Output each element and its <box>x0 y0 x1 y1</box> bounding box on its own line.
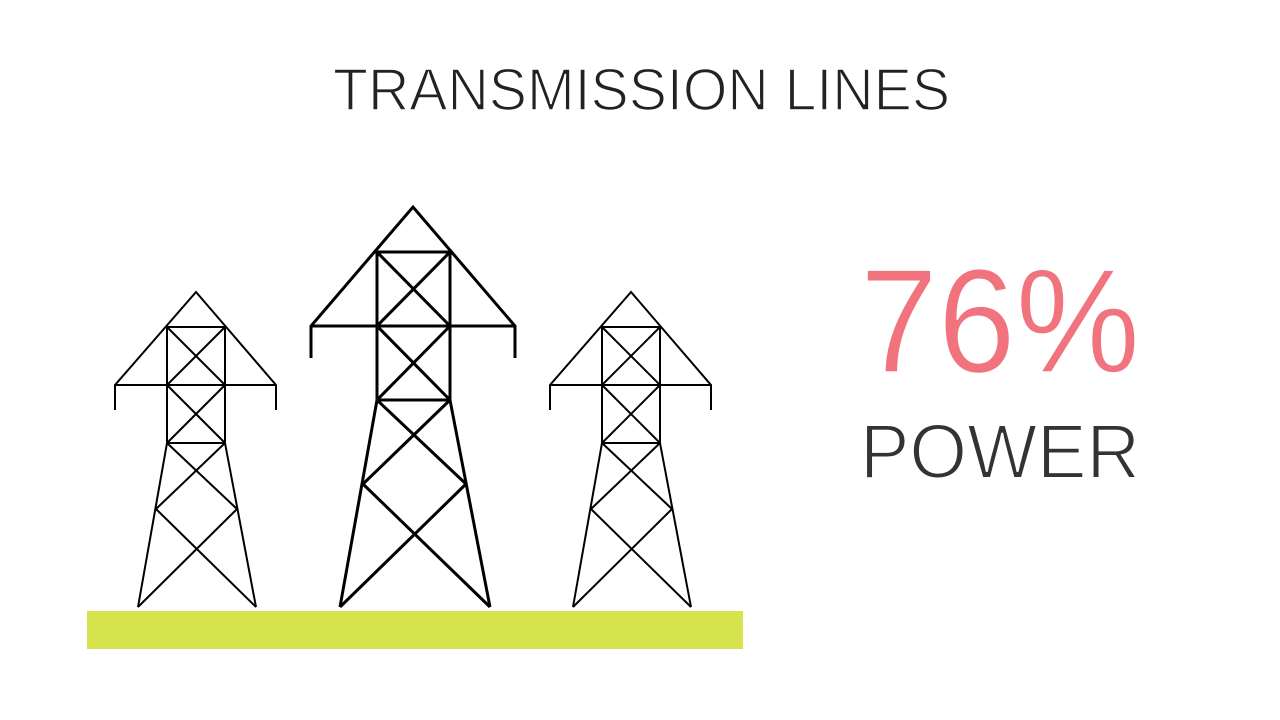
stat label: POWER <box>860 409 1140 495</box>
stat: percentage: 76% <box>860 239 1140 404</box>
icon: right tower <box>550 292 711 607</box>
title: TRANSMISSION LINES <box>333 57 950 123</box>
ground bar <box>87 611 743 649</box>
icon: middle tower <box>311 207 515 607</box>
icon: left tower <box>115 292 276 607</box>
